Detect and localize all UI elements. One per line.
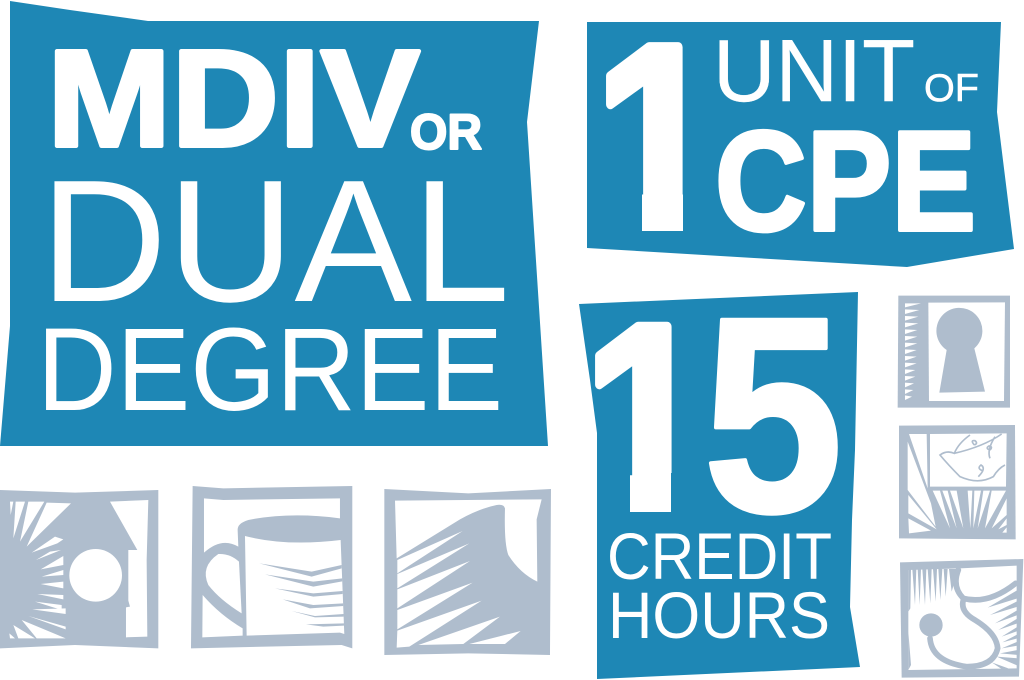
icon: stethoscope <box>900 559 1023 678</box>
numeral: 15 <box>579 259 843 570</box>
panel: 1 unit of CPE <box>587 0 1014 282</box>
heading: hours: HOURS <box>608 578 830 652</box>
heading: of: OF <box>924 67 979 110</box>
icon: keyhole <box>898 296 1010 408</box>
heading: MDiv: MDIV <box>47 22 420 176</box>
panel: MDiv or dual degree <box>0 1 548 446</box>
numeral: 15: 1 <box>584 270 709 563</box>
heading: dual: DUAL <box>40 143 510 338</box>
panel: 15 credit hours <box>579 259 860 679</box>
heading: unit: UNIT <box>713 21 915 120</box>
numeral: 15: 5 <box>703 259 843 570</box>
icon: fin or wing <box>384 489 551 655</box>
heading: credit: CREDIT <box>607 519 832 593</box>
heading: degree: DEGREE <box>37 304 503 436</box>
numeral: 1: 1 <box>595 0 720 282</box>
icon: dove and sunburst <box>899 425 1016 539</box>
heading: or: OR <box>410 104 482 160</box>
icon: coffee mug <box>191 486 352 648</box>
heading: CPE: CPE <box>715 102 976 261</box>
icon: clock tower and sun <box>0 490 158 648</box>
